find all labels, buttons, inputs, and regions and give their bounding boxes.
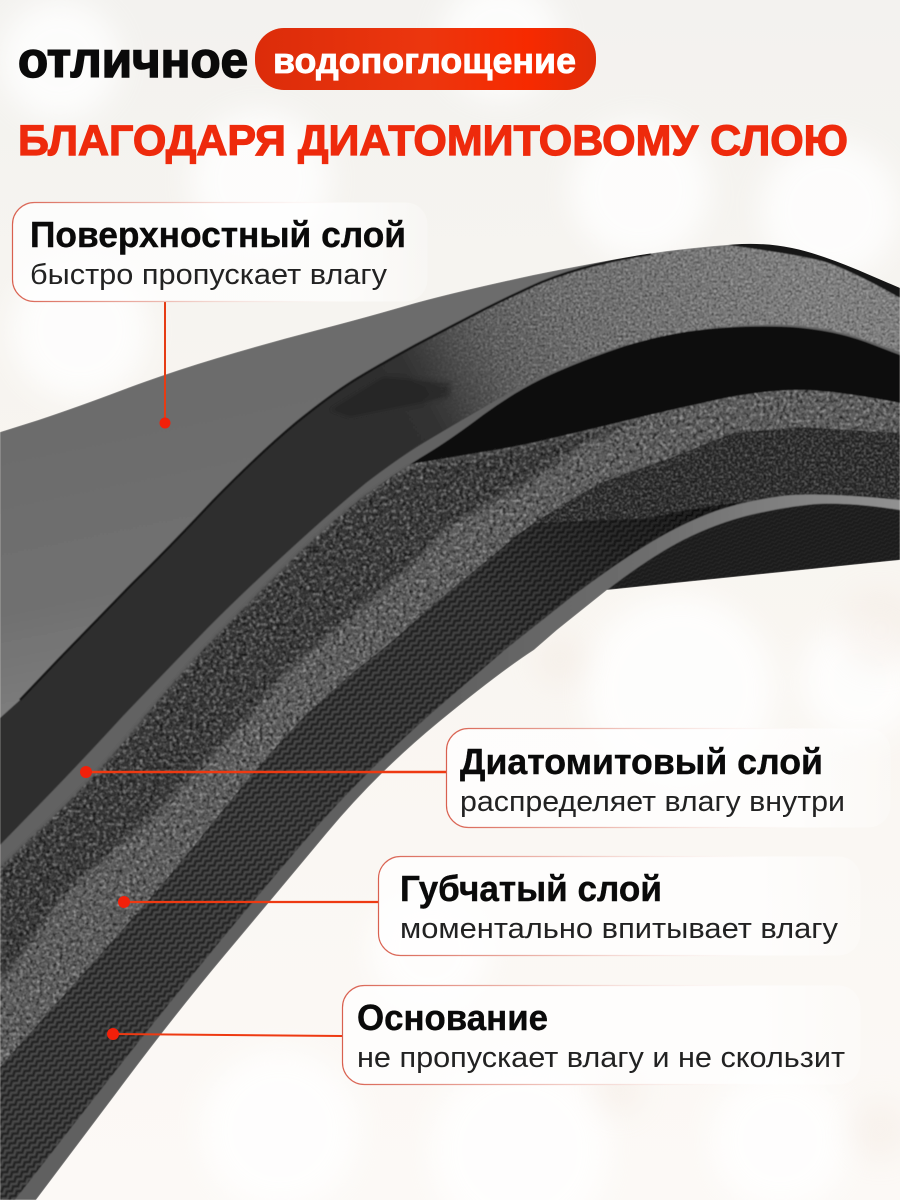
label [460,741,845,818]
label [30,214,406,291]
dark reflection on the side [389,378,450,406]
light gray strip under the surface layer [0,324,900,868]
base layer: top surface [0,244,900,1200]
leader line and dot [107,1028,342,1040]
heading: excellent: отличное [18,32,248,88]
grainy upper right part of the side [432,246,900,413]
label: моментально впитывает влагу [400,913,839,945]
side of the surface layer [0,323,500,845]
leader line and dot [118,896,378,908]
diatomite textured layer [0,390,900,1120]
label: Основание [357,997,548,1038]
title line [18,28,596,90]
darker part of the textured layer [0,420,640,983]
outer gray edge [15,495,900,1200]
callout: surface layer [12,202,428,428]
callout: diatomite layer [80,728,890,828]
dark textured part at the right [533,427,900,523]
black stripe at the top right [725,242,900,298]
label: Поверхностный слой [30,214,406,255]
black wedge under the strip [380,326,900,484]
thin black line along the upper edge of the side [20,254,651,700]
label [357,997,845,1074]
label: Диатомитовый слой [460,741,823,782]
illustration: layered mat cross-section [0,242,900,1200]
label: быстро пропускает влагу [30,259,388,291]
leader line and dot [80,766,446,778]
label: Губчатый слой [400,868,662,909]
label [400,868,839,945]
red pill with water absorption [255,28,596,90]
dark underside of the mat [607,504,900,590]
woven knit layer [0,447,760,1200]
callout: base layer [107,986,860,1084]
shading of the knit layer [442,502,743,676]
subtitle: БЛАГОДАРЯ ДИАТОМИТОВОМУ СЛОЮ [18,117,848,165]
callout: sponge layer [118,856,860,956]
label: не пропускает влагу и не скользит [357,1042,845,1074]
red pill with water absorption: водопоглощение [273,40,576,81]
leader line and dot [160,302,170,428]
label: распределяет влагу внутри [460,786,845,818]
